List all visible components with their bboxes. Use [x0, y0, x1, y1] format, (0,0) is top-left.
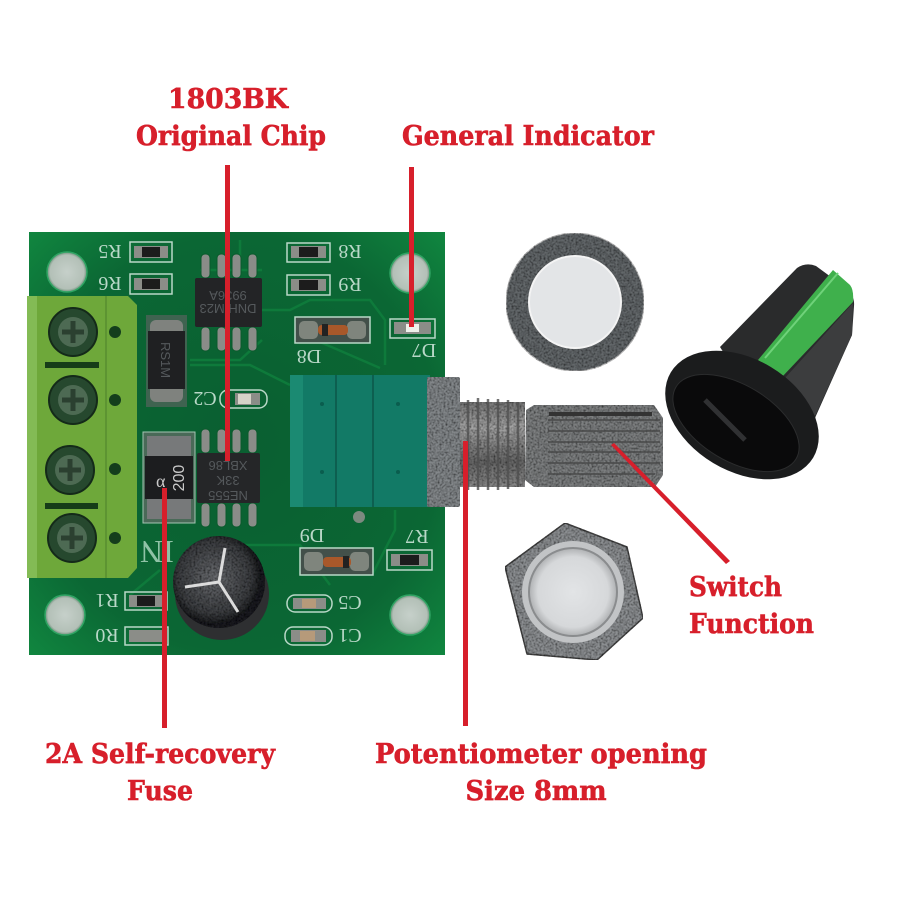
silkscreen labels (mirrored on the board): R8	[338, 240, 362, 262]
pointer line: fuse	[162, 488, 167, 728]
silkscreen labels (mirrored on the board): C2	[193, 387, 217, 409]
glass diodes D8 and D9	[295, 317, 373, 575]
terminal screws	[46, 308, 97, 562]
knurled shaft	[525, 405, 663, 487]
IC pins	[201, 254, 257, 527]
chip: NE555 timer: 33K	[216, 473, 240, 488]
silkscreen labels (mirrored on the board): D8	[297, 345, 321, 367]
potentiometer metal collar	[427, 377, 460, 507]
threaded shaft	[460, 398, 525, 490]
circuit board	[27, 232, 445, 655]
mounting holes	[45, 252, 430, 635]
silkscreen labels (mirrored on the board): IN	[140, 534, 174, 570]
label: 1803BK Original Chip: Original Chip	[136, 121, 326, 152]
label: 1803BK Original Chip	[136, 84, 326, 152]
pointer line: potentiometer	[463, 441, 468, 726]
silkscreen labels (mirrored on the board): R1	[95, 589, 119, 611]
label: Potentiometer opening Size 8mm	[375, 739, 707, 807]
chip: NE555 timer: XBL86	[208, 458, 248, 473]
black control knob with green stripe	[642, 264, 854, 506]
board traces	[130, 240, 395, 595]
silkscreen labels (mirrored on the board): R7	[405, 525, 429, 547]
silkscreen labels (mirrored on the board): D9	[300, 524, 324, 546]
label: Potentiometer opening Size 8mm: Size 8mm	[466, 776, 606, 807]
silkscreen labels (mirrored on the board): R9	[338, 273, 362, 295]
chip: top control IC	[195, 278, 262, 327]
pointer line: indicator	[409, 167, 414, 327]
diode RS1M	[146, 315, 187, 407]
chip: top control IC: DNH M23	[199, 301, 257, 316]
chip: NE555 timer	[197, 453, 260, 503]
label: 2A Self-recovery Fuse	[45, 739, 276, 807]
chip: NE555 timer: NE555	[208, 488, 248, 503]
label: 2A Self-recovery Fuse: 2A Self-recovery	[45, 739, 276, 770]
silkscreen labels (mirrored on the board): C1	[338, 624, 362, 646]
chip: top control IC: 9936A	[209, 288, 247, 303]
SMD resistors and capacitors	[125, 242, 435, 645]
silkscreen labels (mirrored on the board): R6	[98, 272, 122, 294]
pointer line: chip	[225, 165, 230, 461]
potentiometer body	[290, 375, 430, 523]
silkscreen labels (mirrored on the board): R5	[98, 240, 122, 262]
silkscreen labels (mirrored on the board): R0	[95, 624, 119, 646]
label: Switch Function: Switch	[689, 572, 782, 603]
label: Potentiometer opening Size 8mm: Potentiometer opening	[375, 739, 707, 770]
silkscreen labels (mirrored on the board): D7	[412, 339, 436, 361]
hex nut	[505, 523, 643, 660]
board substrate	[29, 232, 445, 655]
pointer line: switch	[611, 443, 730, 564]
label: 2A Self-recovery Fuse: Fuse	[127, 776, 193, 807]
electrolytic capacitor	[173, 536, 269, 640]
label: Switch Function: Function	[689, 609, 814, 640]
flat washer	[506, 233, 644, 371]
self-recovery fuse: 200	[171, 465, 188, 491]
self-recovery fuse	[143, 432, 195, 523]
silkscreen labels (mirrored on the board): C5	[338, 591, 362, 613]
silkscreen labels (mirrored on the board)	[95, 240, 436, 646]
label: Switch Function	[689, 572, 814, 640]
self-recovery fuse: α	[156, 471, 166, 491]
green screw terminal block	[27, 296, 137, 578]
label: 1803BK Original Chip: 1803BK	[168, 84, 290, 115]
label: General Indicator: General Indicator	[402, 121, 655, 152]
diode RS1M: RS1M	[158, 342, 173, 378]
